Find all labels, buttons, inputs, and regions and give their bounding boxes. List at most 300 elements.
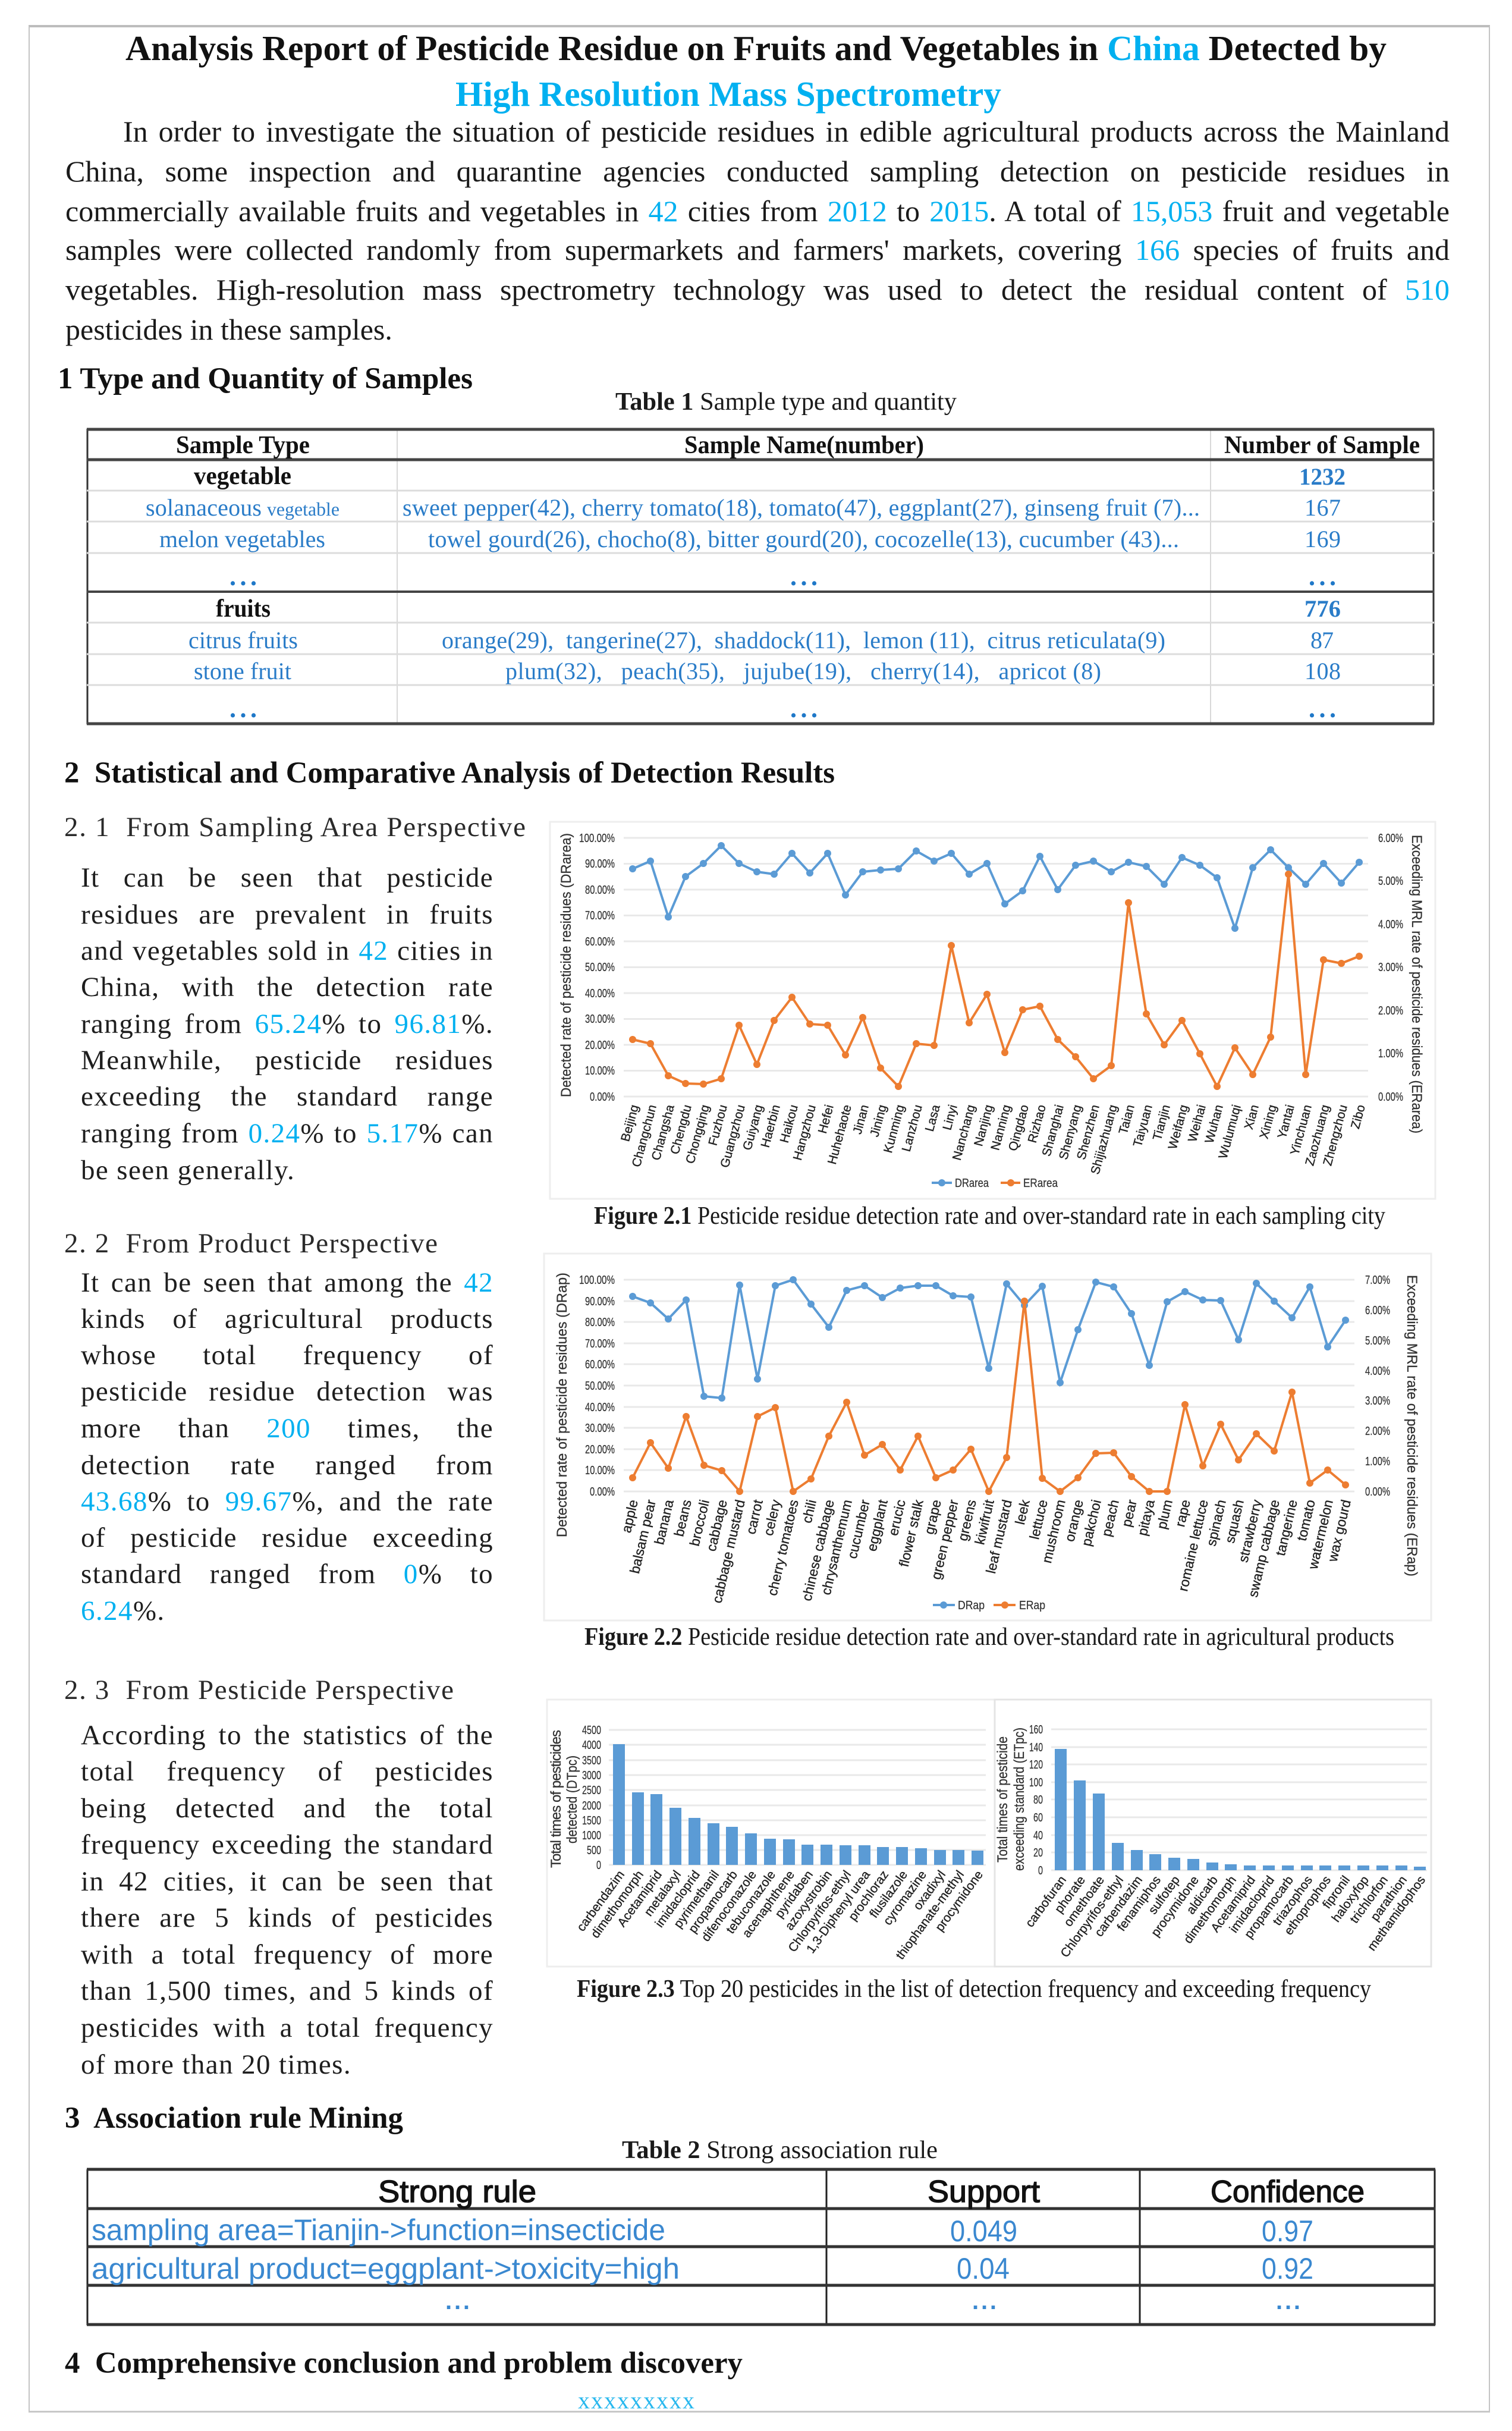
- pesticide labels: Chlorpyrifos-ethyl: [1058, 1873, 1126, 1960]
- bars: [1055, 1749, 1426, 1870]
- section 2.3 body text: being detected and the total: [81, 1793, 493, 1824]
- pesticide labels: flusilazole: [867, 1868, 910, 1921]
- left axis tick labels: 60.00%: [585, 1358, 615, 1371]
- city labels: Nanning: [988, 1103, 1014, 1152]
- rule rows: 0.04: [957, 2252, 1010, 2285]
- fruit rows: ...: [790, 694, 818, 723]
- city labels: Jining: [867, 1103, 889, 1138]
- series ERap: [633, 1301, 1346, 1491]
- pesticide labels: procymidone: [1149, 1873, 1202, 1939]
- section 2.2 body text: It can be seen that among the 42: [81, 1267, 493, 1298]
- city labels: Changsha: [649, 1103, 677, 1162]
- section 2.1 body text: residues are prevalent in fruits: [81, 899, 493, 930]
- axis title: exceeding standard (ETpc): [1011, 1728, 1027, 1871]
- axis title: [548, 1730, 580, 1868]
- pesticide labels: carbofuran: [1023, 1873, 1069, 1930]
- intro paragraph: commercially available fruits and vegetables in 42 cities from 2012 to 2015. A total of 15,053 fruit and vegetable: [65, 194, 1450, 228]
- pesticide labels: parathion: [1368, 1873, 1410, 1924]
- left axis tick labels: 90.00%: [585, 858, 615, 871]
- left axis tick labels: 30.00%: [585, 1422, 615, 1435]
- series DRarea: [633, 846, 1359, 928]
- tick labels: 3500: [582, 1754, 601, 1767]
- product labels: erucic: [885, 1498, 909, 1537]
- pesticide labels: Acetamiprid: [1208, 1873, 1258, 1935]
- left axis tick labels: 30.00%: [585, 1013, 615, 1026]
- tick labels: 80: [1033, 1794, 1043, 1807]
- tick labels: [582, 1724, 601, 1872]
- figure 2.1 line chart: [550, 822, 1435, 1199]
- section 2.3 body text: total frequency of pesticides: [81, 1756, 493, 1787]
- vegetable rows: sweet pepper(42), cherry tomato(18), tomato(47), eggplant(27), ginseng fruit (7)...: [403, 494, 1200, 521]
- city labels: Shijiazhuang: [1088, 1103, 1120, 1176]
- left axis tick labels: 60.00%: [585, 935, 615, 948]
- product labels: greens: [955, 1498, 979, 1543]
- city labels: Shenzhen: [1074, 1103, 1102, 1161]
- product labels: wax gourd: [1324, 1498, 1354, 1564]
- vegetable rows: ...: [1309, 562, 1336, 591]
- fruit rows: 776: [1304, 595, 1341, 622]
- right axis tick labels: 0.00%: [1365, 1485, 1390, 1499]
- city labels: Haikou: [778, 1103, 801, 1144]
- tick labels: 1500: [582, 1814, 601, 1827]
- left axis tick labels: 70.00%: [585, 1337, 615, 1350]
- vegetable rows: 1232: [1299, 463, 1346, 490]
- product labels: chili: [799, 1498, 819, 1525]
- fruit rows: 87: [1310, 627, 1334, 654]
- city labels: Shanghai: [1040, 1103, 1067, 1158]
- city labels: Fuzhou: [706, 1103, 730, 1147]
- product labels: flower stalk: [896, 1498, 926, 1568]
- city labels: Taian: [1117, 1103, 1137, 1136]
- vegetable rows: 169: [1304, 526, 1341, 552]
- tick labels: 2000: [582, 1799, 601, 1813]
- rule rows: agricultural product=eggplant->toxicity=high: [92, 2252, 680, 2285]
- axis title: detected (DTpc): [564, 1755, 580, 1843]
- vegetable rows: solanaceous: [146, 494, 262, 521]
- rule rows: 0.92: [1262, 2252, 1313, 2285]
- city labels: Kunming: [881, 1103, 907, 1154]
- pesticide labels: azoxystrobin: [782, 1868, 835, 1933]
- product labels: plum: [1153, 1498, 1175, 1531]
- section 2.3 body text: pesticides with a total frequency: [81, 2012, 493, 2043]
- tick labels: 160: [1029, 1723, 1043, 1736]
- right axis tick labels: 4.00%: [1365, 1365, 1390, 1378]
- title: High Resolution Mass Spectrometry: [455, 74, 1001, 114]
- product labels: green pepper: [928, 1498, 961, 1581]
- city labels: Hangzhou: [791, 1103, 819, 1162]
- title: Analysis Report of Pesticide Residue on Fruits and Vegetables in China Detected by: [125, 29, 1387, 68]
- tick labels: 100: [1029, 1776, 1043, 1789]
- left axis tick labels: 90.00%: [585, 1295, 615, 1308]
- pesticide labels: imidacloprid: [1227, 1873, 1277, 1936]
- right axis tick labels: 2.00%: [1365, 1425, 1390, 1438]
- product labels: apple: [618, 1498, 641, 1534]
- city labels: Wuhan: [1202, 1103, 1226, 1145]
- right axis tick labels: 1.00%: [1365, 1455, 1390, 1468]
- tick labels: 500: [587, 1844, 601, 1857]
- table 1 header row: Sample Type: [176, 432, 310, 459]
- section 2.3 body text: According to the statistics of the: [81, 1720, 493, 1751]
- right axis tick labels: 2.00%: [1378, 1004, 1403, 1017]
- tick labels: 40: [1033, 1829, 1043, 1842]
- pesticide labels: carbendazim: [1092, 1873, 1145, 1939]
- section 2.3 body text: with a total frequency of more: [81, 1939, 493, 1970]
- product labels: pakchoi: [1079, 1498, 1104, 1547]
- pesticide labels: carbendazim: [574, 1868, 627, 1934]
- heading 2.2: 2. 2 From Product Perspective: [64, 1228, 438, 1259]
- bars: [613, 1744, 983, 1865]
- city labels: Xining: [1258, 1103, 1280, 1141]
- rule rows: 0.97: [1262, 2215, 1313, 2248]
- product labels: cherry tomatoes: [764, 1498, 801, 1597]
- section 2.1 body text: ranging from 0.24% to 5.17% can: [81, 1118, 493, 1149]
- axis titles: Detected rate of pesticide residues (DRap): [554, 1273, 570, 1537]
- legend: DRarea: [955, 1177, 989, 1190]
- rule rows: 0.049: [950, 2215, 1017, 2248]
- city labels: Guiyang: [740, 1103, 766, 1152]
- fruit rows: citrus fruits: [188, 627, 298, 654]
- rule rows: sampling area=Tianjin->function=insecticide: [92, 2213, 665, 2247]
- product labels: swamp cabbage: [1245, 1498, 1282, 1598]
- fruit rows: orange(29), tangerine(27), shaddock(11), lemon (11), citrus reticulata(9): [442, 627, 1165, 654]
- heading 3: 3 Association rule Mining: [65, 2101, 403, 2134]
- series DRap: [633, 1280, 1346, 1398]
- table 2 header row: Strong rule: [378, 2175, 536, 2209]
- pesticide labels: fipronil: [1320, 1873, 1353, 1911]
- city labels: Beijing: [618, 1103, 642, 1143]
- product labels: celery: [760, 1498, 784, 1537]
- city labels: Chongqing: [683, 1103, 712, 1165]
- city labels: Weifang: [1166, 1103, 1191, 1151]
- left axis tick labels: 20.00%: [585, 1443, 615, 1456]
- left axis tick labels: 100.00%: [579, 1274, 615, 1287]
- fruit rows: fruits: [216, 595, 271, 623]
- rule rows: ...: [972, 2288, 997, 2314]
- vegetable rows: ...: [790, 562, 818, 591]
- product labels: tomato: [1294, 1498, 1318, 1543]
- pesticide labels: difenoconazole: [699, 1868, 759, 1944]
- section 2.1 body text: China, with the detection rate: [81, 972, 493, 1003]
- figure 2.2 line chart: [544, 1254, 1431, 1620]
- city labels: Nanchang: [950, 1103, 978, 1162]
- pesticide labels: fenamiphos: [1115, 1873, 1164, 1934]
- left axis tick labels: 80.00%: [585, 1316, 615, 1329]
- product labels: romaine lettuce: [1175, 1498, 1211, 1593]
- product labels: orange: [1061, 1498, 1086, 1543]
- right axis tick labels: 0.00%: [1378, 1091, 1403, 1104]
- pesticide labels: procymidone: [933, 1868, 986, 1934]
- table 2 caption: Table 2 Strong association rule: [622, 2137, 938, 2164]
- rule rows: [92, 2213, 1313, 2314]
- legend: [932, 1177, 1058, 1190]
- city labels: Tianjin: [1150, 1103, 1173, 1142]
- section 2.3 body text: frequency exceeding the standard: [81, 1829, 493, 1860]
- section 2.3 body text: there are 5 kinds of pesticides: [81, 1902, 493, 1933]
- section 2.1 body text: Meanwhile, pesticide residues: [81, 1045, 493, 1076]
- product labels: [618, 1498, 1354, 1604]
- pesticide labels: tebuconazole: [724, 1868, 778, 1936]
- section 2.3 body text: [81, 1720, 493, 2080]
- heading 2.3: 2. 3 From Pesticide Perspective: [64, 1675, 454, 1706]
- city labels: Hefei: [816, 1103, 837, 1135]
- product labels: chrysanthemum: [818, 1498, 855, 1597]
- section 2.2 body text: whose total frequency of: [81, 1340, 493, 1371]
- fruit rows: ...: [230, 694, 257, 723]
- left axis tick labels: 10.00%: [585, 1064, 615, 1078]
- section 2.1 body text: be seen generally.: [81, 1155, 295, 1186]
- left axis tick labels: [579, 1274, 615, 1499]
- tick labels: 4000: [582, 1739, 601, 1752]
- left axis tick labels: 20.00%: [585, 1039, 615, 1052]
- section 2.2 body text: of pesticide residue exceeding: [81, 1522, 493, 1553]
- section 2.2 body text: detection rate ranged from: [81, 1450, 493, 1481]
- city labels: Yantai: [1275, 1103, 1297, 1140]
- axis titles: Detected rate of pesticide residues (DRarea): [558, 833, 574, 1097]
- city labels: Zhengzhou: [1321, 1103, 1350, 1167]
- right axis tick labels: 4.00%: [1378, 918, 1403, 931]
- vegetable rows: vegetable: [194, 463, 291, 490]
- vegetable rows: 167: [1304, 494, 1341, 521]
- left axis tick labels: 10.00%: [585, 1464, 615, 1477]
- right axis tick labels: 3.00%: [1365, 1394, 1390, 1408]
- product labels: lettuce: [1026, 1498, 1051, 1541]
- pesticide labels: propamocarb: [1242, 1873, 1296, 1941]
- pesticide labels: [1023, 1873, 1428, 1960]
- title: [125, 29, 1387, 114]
- pesticide labels: sulfotep: [1146, 1873, 1183, 1917]
- pesticide labels: [574, 1868, 986, 1962]
- pesticide labels: pyrimethanil: [671, 1868, 722, 1931]
- axis title: Total times of pesticide: [995, 1736, 1011, 1862]
- right axis tick labels: 7.00%: [1365, 1274, 1390, 1287]
- product labels: peach: [1098, 1498, 1122, 1538]
- figure 2.3 right bar chart: exceeding frequency: [995, 1700, 1431, 1967]
- city labels: Chengdu: [668, 1103, 694, 1156]
- product labels: balsam pear: [627, 1498, 659, 1575]
- section 2.2 body text: [81, 1267, 493, 1626]
- product labels: grape: [921, 1498, 944, 1535]
- city labels: Rizhao: [1026, 1103, 1049, 1144]
- city labels: Zibo: [1348, 1103, 1368, 1130]
- right axis tick labels: 3.00%: [1378, 961, 1403, 974]
- table 1 header row: Sample Name(number): [684, 432, 924, 459]
- product labels: beans: [671, 1498, 694, 1538]
- section 2.3 body text: of more than 20 times.: [81, 2049, 351, 2080]
- city labels: Taiyuan: [1131, 1103, 1155, 1148]
- tick labels: 0: [1038, 1864, 1043, 1877]
- left axis tick labels: 50.00%: [585, 961, 615, 974]
- axis titles: [554, 1273, 1420, 1576]
- product labels: strawberry: [1235, 1498, 1265, 1564]
- right axis tick labels: [1378, 832, 1403, 1104]
- section 2.2 body text: standard ranged from 0% to: [81, 1559, 493, 1590]
- heading 1: 1 Type and Quantity of Samples: [58, 362, 473, 395]
- heading 2: 2 Statistical and Comparative Analysis of Detection Results: [64, 756, 835, 789]
- product labels: broccoli: [687, 1498, 712, 1547]
- city labels: Guangzhou: [718, 1103, 748, 1169]
- pesticide labels: methamidophos: [1365, 1873, 1428, 1953]
- city labels: Yinchuan: [1288, 1103, 1315, 1157]
- tick labels: 140: [1029, 1741, 1043, 1754]
- fruit rows: 108: [1304, 658, 1341, 684]
- section 2.3 body text: in 42 cities, it can be seen that: [81, 1866, 493, 1897]
- axis titles: [558, 833, 1425, 1133]
- right axis tick labels: 6.00%: [1378, 832, 1403, 845]
- tick labels: 60: [1033, 1811, 1043, 1824]
- axis title: [995, 1728, 1027, 1871]
- axis titles: Exceeding MRL rate of pesticide residues (ERarea): [1409, 835, 1425, 1133]
- vegetable rows: [146, 463, 1346, 591]
- pesticide labels: omethoate: [1061, 1873, 1107, 1929]
- left axis tick labels: 100.00%: [579, 832, 615, 845]
- pesticide labels: metalaxyl: [642, 1868, 684, 1919]
- city labels: Qingdao: [1006, 1103, 1032, 1152]
- pesticide labels: ethoprophos: [1282, 1873, 1334, 1937]
- pesticide labels: thiophanate-methyl: [893, 1868, 967, 1962]
- intro paragraph: [65, 115, 1450, 346]
- vegetable rows: towel gourd(26), chocho(8), bitter gourd(20), cocozelle(13), cucumber (43)...: [428, 526, 1179, 552]
- intro paragraph: samples were collected randomly from supermarkets and farmers' markets, covering 166 species of fruits and: [65, 233, 1450, 266]
- intro paragraph: In order to investigate the situation of pesticide residues in edible agricultural products across the Mainland: [123, 115, 1450, 148]
- product labels: watermelon: [1305, 1498, 1336, 1571]
- tick labels: 0: [596, 1859, 601, 1872]
- pesticide labels: cyromazine: [881, 1868, 929, 1928]
- section 2.1 body text: It can be seen that pesticide: [81, 862, 493, 893]
- legend: DRap: [958, 1599, 985, 1612]
- tick labels: 4500: [582, 1724, 601, 1737]
- pesticide labels: dimethomorph: [1181, 1873, 1239, 1946]
- pesticide labels: oxadixyl: [911, 1868, 948, 1912]
- left axis tick labels: 0.00%: [590, 1091, 615, 1104]
- tick labels: 2500: [582, 1784, 601, 1797]
- right axis tick labels: 6.00%: [1365, 1304, 1390, 1317]
- table 1 header row: [176, 432, 1420, 459]
- right axis tick labels: 5.00%: [1378, 875, 1403, 888]
- fruit rows: [188, 595, 1341, 723]
- conclusion placeholder text: xxxxxxxxx: [578, 2387, 694, 2414]
- pesticide labels: dimethomorph: [589, 1868, 646, 1941]
- left axis tick labels: 40.00%: [585, 1401, 615, 1414]
- pesticide labels: pyridaben: [772, 1868, 816, 1921]
- fruit rows: ...: [1309, 694, 1336, 723]
- tick labels: 20: [1033, 1846, 1043, 1860]
- right axis tick labels: 5.00%: [1365, 1334, 1390, 1348]
- product labels: banana: [651, 1498, 677, 1546]
- section 2.2 body text: 43.68% to 99.67%, and the rate: [81, 1486, 493, 1517]
- section 2.2 body text: kinds of agricultural products: [81, 1304, 493, 1334]
- tick labels: 1000: [582, 1829, 601, 1842]
- product labels: pitaya: [1134, 1498, 1158, 1537]
- pesticide labels: Chlorpyrifos-ethyl: [785, 1868, 854, 1955]
- product labels: pear: [1118, 1498, 1140, 1528]
- city labels: Lanzhou: [900, 1103, 925, 1153]
- product labels: chinese cabbage: [799, 1498, 837, 1603]
- section 2.1 body text: ranging from 65.24% to 96.81%.: [81, 1009, 493, 1039]
- pesticide labels: trichlorfon: [1347, 1873, 1391, 1926]
- section 2.2 body text: 6.24%.: [81, 1595, 165, 1626]
- intro paragraph: pesticides in these samples.: [65, 313, 392, 346]
- pesticide labels: aldicarb: [1184, 1873, 1221, 1917]
- table 2: strong association rules: [87, 2169, 1435, 2325]
- city labels: Jinan: [851, 1103, 872, 1136]
- right axis tick labels: [1365, 1274, 1390, 1499]
- section 2.2 body text: pesticide residue detection was: [81, 1376, 493, 1407]
- heading 2.1: 2. 1 From Sampling Area Perspective: [64, 812, 526, 843]
- legend: ERap: [1019, 1599, 1045, 1612]
- tick labels: [1029, 1723, 1043, 1877]
- product labels: kiwifruit: [972, 1498, 997, 1546]
- product labels: squash: [1222, 1498, 1247, 1544]
- section 2.1 body text: and vegetables sold in 42 cities in: [81, 935, 493, 966]
- fruit rows: plum(32), peach(35), jujube(19), cherry(14), apricot (8): [505, 658, 1101, 684]
- rule rows: ...: [445, 2288, 470, 2314]
- city labels: Nanjing: [972, 1103, 996, 1148]
- left axis tick labels: [579, 832, 615, 1104]
- pesticide labels: Acetamiprid: [615, 1868, 665, 1930]
- vegetable rows: vegetable: [267, 498, 340, 520]
- left axis tick labels: 50.00%: [585, 1380, 615, 1393]
- legend: ERarea: [1023, 1177, 1058, 1190]
- rule rows: ...: [1276, 2288, 1300, 2314]
- pesticide labels: imidacloprid: [653, 1868, 703, 1930]
- product labels: cabbage: [703, 1498, 730, 1553]
- fruit rows: stone fruit: [194, 658, 291, 684]
- product labels: spinach: [1203, 1498, 1229, 1547]
- pesticide labels: triazophos: [1270, 1873, 1315, 1928]
- product labels: cabbage mustard: [709, 1498, 748, 1604]
- figure 2.1 caption: Figure 2.1 Pesticide residue detection rate and over-standard rate in each sampling city: [594, 1202, 1385, 1230]
- left axis tick labels: 40.00%: [585, 987, 615, 1000]
- left axis tick labels: 80.00%: [585, 884, 615, 897]
- section 2.1 body text: exceeding the standard range: [81, 1081, 493, 1112]
- series ERarea: [633, 874, 1359, 1086]
- city labels: Zaozhuang: [1303, 1103, 1332, 1167]
- city labels: Weihai: [1186, 1103, 1209, 1144]
- city labels: Huhehaote: [825, 1103, 854, 1166]
- pesticide labels: phorate: [1052, 1873, 1088, 1916]
- city labels: Shenyang: [1057, 1103, 1085, 1161]
- table 2 header row: Support: [928, 2175, 1041, 2209]
- pesticide labels: haloxyfop: [1329, 1873, 1372, 1925]
- city labels: Lasa: [923, 1103, 943, 1133]
- intro paragraph: vegetables. High-resolution mass spectrometry technology was used to detect the residual content of 510: [65, 273, 1450, 306]
- table 1 caption: Table 1 Sample type and quantity: [615, 388, 957, 416]
- city labels: Wulumuqi: [1216, 1103, 1244, 1160]
- right axis tick labels: 1.00%: [1378, 1047, 1403, 1060]
- table 2 header row: Confidence: [1211, 2175, 1365, 2209]
- city labels: Xian: [1242, 1103, 1262, 1131]
- product labels: mushroom: [1039, 1498, 1068, 1565]
- product labels: rape: [1172, 1498, 1193, 1528]
- vegetable rows: melon vegetables: [159, 526, 325, 552]
- pesticide labels: prochloraz: [846, 1868, 891, 1923]
- product labels: leaf mustard: [983, 1498, 1015, 1575]
- city labels: Linyi: [940, 1103, 960, 1132]
- heading 4: 4 Comprehensive conclusion and problem discovery: [65, 2346, 743, 2379]
- section 2.2 body text: more than 200 times, the: [81, 1413, 493, 1444]
- figure 2.2 caption: Figure 2.2 Pesticide residue detection rate and over-standard rate in agricultural products: [584, 1623, 1394, 1651]
- axis titles: Exceeding MRL rate of pesticide residues (ERap): [1404, 1275, 1420, 1576]
- pesticide labels: propamocarb: [686, 1868, 740, 1936]
- product labels: tangerine: [1272, 1498, 1300, 1557]
- table 1: sample type and quantity: [87, 429, 1434, 724]
- axis title: Total times of pesticides: [548, 1730, 564, 1868]
- table 2 header row: [378, 2175, 1365, 2209]
- city labels: Changchun: [630, 1103, 659, 1169]
- city labels: Haerbin: [759, 1103, 783, 1149]
- pesticide labels: acenaphthene: [740, 1868, 797, 1940]
- intro paragraph: China, some inspection and quarantine agencies conducted sampling detection on pesticide residues in: [65, 155, 1450, 188]
